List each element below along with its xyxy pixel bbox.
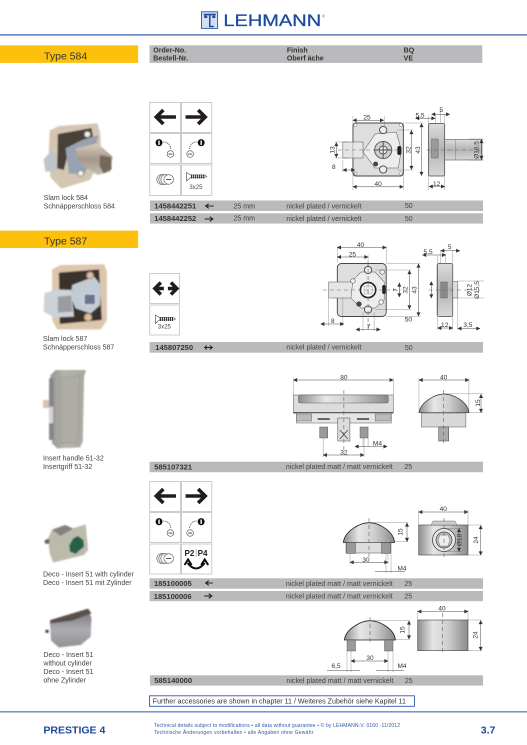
drawing: lock 584 front bbox=[329, 114, 424, 190]
drawing: lock 584 front: 32 bbox=[405, 146, 412, 154]
caption: deco insert without cylinder bbox=[42, 652, 94, 684]
logo mark bbox=[201, 12, 218, 28]
icon grid: deco: P4 bbox=[198, 549, 208, 558]
table header: Bestell-Nr. bbox=[153, 56, 188, 63]
drawing: insert handle side bbox=[419, 375, 483, 445]
caption: slam lock 587: Slam lock 587 bbox=[43, 336, 87, 343]
drawing: insert handle front: 80 bbox=[340, 375, 348, 381]
drawing: lock 587 front: 7 bbox=[367, 324, 371, 330]
drawing: deco without cylinder top: 24 bbox=[472, 631, 479, 639]
footer: series name: PRESTIGE 4 bbox=[43, 725, 106, 737]
icon grid: 587 bbox=[150, 274, 179, 335]
icon grid: 584 bbox=[150, 102, 212, 196]
drawing: lock 584 front: 43 bbox=[415, 146, 422, 154]
drawing: lock 584 front: 25 bbox=[363, 114, 371, 121]
drawing: insert handle front: 32 bbox=[340, 450, 348, 456]
row 1458442252: 1458442252 bbox=[154, 214, 196, 223]
table header: Finish bbox=[287, 48, 308, 55]
caption: slam lock 587 bbox=[43, 336, 114, 352]
table row 585107321 bbox=[150, 462, 483, 472]
caption: insert handle bbox=[43, 456, 104, 471]
caption: deco insert without cylinder: ohne Zylinder bbox=[43, 678, 87, 684]
row 1458442251: 50 bbox=[405, 203, 413, 210]
photo: slam lock 584 bbox=[44, 123, 113, 189]
header logo bbox=[201, 11, 325, 30]
caption: slam lock 587: Schnäpperschloss 587 bbox=[43, 345, 114, 352]
drawing: lock 587 side: 5,5 bbox=[424, 249, 433, 256]
caption: deco insert with cylinder bbox=[43, 572, 135, 587]
drawing: lock 587 front: 43 bbox=[411, 286, 418, 294]
drawing: lock 584 side bbox=[415, 107, 484, 190]
caption: deco insert without cylinder: Deco - Insert 51 bbox=[43, 652, 94, 659]
table row 585140000 bbox=[150, 675, 483, 686]
drawing: lock 584 front: 13 bbox=[329, 146, 336, 154]
row 1458442251: nickel plated / vernickelt bbox=[286, 203, 362, 210]
table row 185100006: nickel plated matt / matt vernickelt bbox=[286, 594, 393, 601]
table row 585107321: 585107321 bbox=[154, 463, 192, 471]
drawing: insert handle side: 40 bbox=[440, 375, 448, 381]
photo: insert handle bbox=[43, 370, 86, 448]
row 1458442251: 25 mm bbox=[233, 204, 255, 210]
footer: legal notice: Technical details subject to modifications • all data without guarantee • © by LEHMANN-V. 0160 -11/2012 bbox=[154, 722, 400, 729]
drawing: deco with cylinder top: 40 bbox=[440, 506, 447, 513]
drawing: deco without cylinder section: 6,5 bbox=[331, 663, 341, 670]
footer: legal notice bbox=[154, 722, 400, 736]
caption: slam lock 584: Slam lock 584 bbox=[44, 195, 88, 202]
table row 585107321: 25 bbox=[404, 464, 412, 471]
caption: slam lock 584 bbox=[44, 195, 115, 210]
drawing: deco with cylinder top: 24 bbox=[473, 536, 480, 544]
drawing: insert handle front bbox=[293, 375, 393, 457]
table row 585140000: 585140000 bbox=[154, 676, 192, 685]
photo: deco insert with cylinder bbox=[44, 524, 88, 563]
drawing: lock 587 front: 25 bbox=[349, 252, 356, 258]
heading: Type 587 bbox=[0, 231, 138, 248]
bottom section: deco inserts and footer bbox=[0, 482, 527, 737]
drawing: lock 587 front: 8 bbox=[331, 318, 335, 325]
photo: deco insert without cylinder bbox=[45, 609, 91, 647]
drawing: deco without cylinder section bbox=[327, 617, 410, 672]
table header: BQ bbox=[404, 48, 415, 55]
table rows: 584 bbox=[150, 200, 483, 224]
drawing: lock 584 front: 8 bbox=[332, 164, 336, 171]
top section: type 584 bbox=[0, 11, 527, 224]
row 1458442251: 1458442251 bbox=[154, 201, 196, 210]
drawing: deco with cylinder section bbox=[344, 518, 408, 573]
caption: deco insert with cylinder: Deco - Insert 51 with cylinder bbox=[43, 572, 135, 579]
heading: Type 587: Type 587 bbox=[44, 236, 87, 247]
drawing: lock 587 front: 40 bbox=[357, 242, 365, 249]
drawing: deco with cylinder section: M4 bbox=[397, 566, 407, 572]
table row 185100005: 185100005 bbox=[154, 579, 192, 588]
drawing: lock 587 front: 50 bbox=[405, 317, 412, 323]
drawing: deco with cylinder section: 15 bbox=[398, 528, 404, 536]
caption: slam lock 584: Schnäpperschloss 584 bbox=[44, 203, 115, 210]
row 1458442252: 50 bbox=[405, 216, 413, 223]
table row 145807250: nickel plated / vernickelt bbox=[286, 345, 362, 352]
accessories note bbox=[150, 696, 414, 706]
drawing: lock 587 front: 32 bbox=[403, 286, 410, 294]
table row 185100005: 25 bbox=[404, 581, 412, 588]
table row 185100006: 25 bbox=[404, 594, 412, 601]
drawing: insert handle front: M4 bbox=[373, 441, 382, 447]
caption: deco insert without cylinder: without cylinder bbox=[42, 661, 93, 667]
drawing: lock 584 side: 5 bbox=[439, 107, 443, 114]
footer: legal notice: Technische Änderungen vorbehalten • alle Angaben ohne Gewähr bbox=[154, 729, 314, 736]
caption: insert handle: Insert handle 51-32 bbox=[43, 456, 104, 462]
drawing: lock 584 side: Ø16,5 bbox=[473, 141, 480, 159]
table header bbox=[150, 45, 482, 63]
caption: deco insert without cylinder: Deco - Insert 51 bbox=[43, 669, 94, 676]
drawing: lock 587 side bbox=[423, 244, 484, 330]
drawing: lock 584 side: 5,5 bbox=[415, 113, 425, 119]
drawing: lock 587 side: 5 bbox=[448, 244, 452, 251]
row 1458442251 bbox=[150, 200, 483, 211]
drawing: deco without cylinder top bbox=[418, 606, 482, 655]
footer: page number: 3.7 bbox=[481, 725, 496, 737]
table row 145807250: 50 bbox=[405, 345, 413, 352]
drawing: insert handle side: 15 bbox=[475, 399, 482, 407]
drawing: lock 584 front: 40 bbox=[375, 181, 382, 188]
drawing: deco without cylinder section: 30 bbox=[366, 655, 374, 662]
drawing: lock 587 side: 12 bbox=[441, 322, 449, 329]
caption: insert handle: Insertgriff 51-32 bbox=[43, 464, 92, 471]
row 1458442252: 25 mm bbox=[233, 216, 255, 222]
heading: Type 584: Type 584 bbox=[44, 51, 87, 62]
accessories note: Further accessories are shown in chapter 11 / Weiteres Zubehör siehe Kapitel 11 bbox=[153, 699, 406, 706]
logo wordmark: LEHMANN bbox=[223, 11, 321, 30]
middle section: type 587 and insert handle bbox=[0, 231, 484, 472]
caption: deco insert with cylinder: Deco - Insert 51 mit Zylinder bbox=[43, 580, 132, 587]
row 1458442252: nickel plated / vernickelt bbox=[286, 216, 362, 223]
icon grid: 584: 3x25 bbox=[189, 185, 203, 191]
table row 585140000: 25 bbox=[405, 678, 413, 685]
table row 185100005: nickel plated matt / matt vernickelt bbox=[286, 581, 393, 588]
table row 185100005 bbox=[150, 578, 483, 589]
table row 145807250 bbox=[150, 342, 483, 353]
photo: slam lock 587 bbox=[44, 264, 107, 329]
drawing: deco without cylinder section: 15 bbox=[400, 626, 406, 634]
drawing: deco with cylinder top: Ø18 bbox=[456, 533, 464, 546]
drawing: lock 587 front bbox=[321, 242, 421, 332]
table row 145807250: 145807250 bbox=[155, 343, 193, 352]
heading: Type 584 bbox=[0, 45, 138, 63]
table row 185100006 bbox=[150, 591, 483, 601]
drawing: lock 584 side: 12 bbox=[433, 181, 441, 188]
drawing: lock 587 side: Ø12 bbox=[466, 283, 473, 296]
registered mark: ® bbox=[322, 15, 325, 18]
table row 585107321: nickel plated matt / matt vernickelt bbox=[286, 464, 393, 471]
table row 585140000: nickel plated matt / matt vernickelt bbox=[286, 678, 393, 685]
row 1458442252 bbox=[150, 213, 483, 224]
drawing: deco with cylinder top bbox=[419, 506, 482, 560]
drawing: lock 587 side: 3,5 bbox=[463, 322, 473, 329]
icon grid: deco: P2 bbox=[185, 549, 195, 558]
drawing: deco without cylinder top: 40 bbox=[438, 606, 446, 612]
icon grid: 587: 3x25 bbox=[158, 325, 172, 330]
table row 185100006: 185100006 bbox=[154, 592, 192, 601]
table header: VE bbox=[404, 56, 413, 63]
drawing: deco without cylinder section: M4 bbox=[397, 663, 407, 670]
drawing: lock 587 front: 7 bbox=[393, 288, 400, 292]
drawing: lock 587 side: Ø15,5 bbox=[474, 281, 481, 299]
icon grid: deco bbox=[150, 482, 212, 574]
drawing: deco with cylinder section: 30 bbox=[362, 557, 370, 564]
table header: Oberf äche bbox=[287, 56, 324, 63]
table header: Order-No. bbox=[153, 48, 186, 55]
